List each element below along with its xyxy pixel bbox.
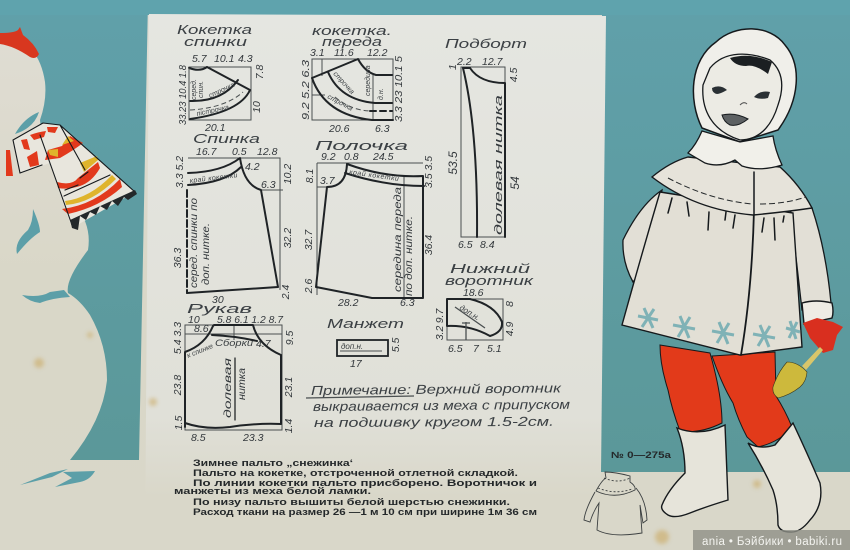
measurements: 2.6 — [303, 279, 315, 294]
pattern piece: нитка — [236, 368, 248, 400]
measurements — [446, 56, 522, 251]
pattern piece — [189, 67, 251, 120]
measurements: 2.4 — [280, 285, 292, 300]
pattern piece: серед. — [190, 79, 198, 100]
measurements: 2.2 — [456, 56, 472, 68]
title: Подборт — [445, 36, 527, 51]
measurements: 3.3 5.2 — [174, 156, 186, 188]
panel: pattern sheet — [145, 14, 606, 550]
diagram: манжет — [327, 316, 404, 370]
measurements — [172, 146, 294, 306]
measurements — [172, 314, 296, 444]
measurements: 32.2 — [282, 228, 294, 248]
pattern piece: д.н. — [377, 88, 385, 100]
coat gathers — [668, 198, 784, 240]
measurements: 33.23 10.4 1.8 — [177, 65, 189, 125]
title: Рукав — [187, 301, 252, 316]
pattern piece — [185, 325, 282, 430]
measurements: 53.5 — [446, 151, 460, 175]
hood — [693, 29, 796, 142]
measurements: 4.5 — [508, 68, 520, 82]
measurements: 23.3 — [242, 432, 264, 444]
description text block — [174, 458, 537, 517]
pattern piece: середина — [364, 65, 372, 96]
measurements: 10 — [188, 314, 200, 326]
measurements: 3.7 — [320, 175, 336, 187]
paper stains — [34, 332, 761, 544]
title — [445, 261, 534, 288]
measurements: 6.3 — [400, 297, 415, 309]
measurements: 0.5 — [232, 146, 247, 158]
measurements: 1.5 — [173, 416, 185, 430]
measurements: 9.2 5.2 6.3 — [300, 60, 312, 120]
pattern piece: доп.н. — [458, 303, 481, 322]
shovel — [773, 347, 823, 398]
left eye — [712, 86, 727, 94]
measurements: 8 — [504, 301, 516, 307]
right boot — [748, 423, 821, 532]
measurements: 3.1 — [310, 47, 325, 59]
pattern piece: долевая нитка — [493, 95, 505, 235]
pattern piece: долевая — [222, 357, 234, 418]
measurements: 6.3 — [261, 179, 276, 191]
measurements: 36.3 — [172, 248, 184, 268]
title: Манжет — [327, 316, 404, 331]
measurements: 10.2 — [282, 164, 294, 184]
measurements: 1 — [447, 64, 459, 70]
measurements: 5.4 3.3 — [172, 322, 184, 354]
title: воротник — [445, 273, 534, 288]
title: спинки — [184, 34, 247, 49]
pattern piece: край кокетки — [349, 168, 399, 183]
diagram: рукав — [172, 301, 296, 444]
girl illustration — [622, 29, 843, 532]
face — [703, 54, 782, 140]
measurements: 9.7 — [434, 308, 446, 323]
measurements: 5.8 6.1 1.2 8.7 — [217, 314, 284, 326]
description text block: Расход ткани на размер 26 —1 м 10 см при ширине 1м 36 см — [193, 507, 537, 517]
measurements: 9.2 — [321, 151, 336, 163]
measurements: 12.2 — [367, 47, 388, 59]
article number: № 0—275а — [611, 450, 672, 460]
snowman hat — [0, 27, 39, 58]
hair — [730, 56, 772, 74]
description text block: манжеты из меха белой ламки. — [174, 486, 371, 496]
pattern piece: середина переда — [392, 187, 404, 292]
mitten — [803, 318, 843, 353]
cape stitching — [668, 178, 806, 204]
pattern piece: доп. нитке. — [200, 223, 212, 285]
measurements: 11.6 — [334, 47, 354, 59]
title: Полочка — [315, 138, 408, 153]
red right leg — [712, 352, 792, 447]
red left leg — [660, 345, 722, 432]
diagram: нижний воротник — [434, 261, 534, 355]
title — [177, 22, 252, 49]
note: выкраивается из меха с припуском — [313, 397, 570, 414]
title — [312, 23, 392, 49]
measurements — [350, 338, 402, 370]
snowman button dab — [16, 209, 40, 254]
measurements: 12.7 — [482, 56, 504, 68]
nose — [740, 103, 747, 105]
title: переда — [322, 34, 382, 49]
snowman ground shadow — [20, 469, 95, 487]
measurements: 6.5 — [448, 343, 463, 355]
right teal background — [601, 0, 850, 472]
description text block: Зимнее пальто „снежинка‘ — [193, 458, 353, 468]
coat centre seam — [741, 210, 754, 355]
mouth — [722, 114, 748, 125]
measurements: 4.9 — [504, 322, 516, 336]
pattern piece: строчка — [332, 71, 355, 96]
measurements: 16.7 — [196, 146, 218, 158]
snowman details — [0, 27, 137, 487]
pattern piece — [461, 67, 505, 237]
measurements: 3.5 3.5 — [423, 156, 435, 188]
measurements: 23.1 — [283, 377, 295, 398]
measurements: 3.2 — [434, 326, 446, 340]
watermark — [693, 530, 850, 550]
measurements: 17 — [350, 358, 363, 370]
measurements: 20.6 — [328, 123, 350, 135]
measurements: 36.4 — [423, 235, 435, 255]
description text block: По линии кокетки пальто присборено. Воротничок и — [193, 478, 537, 488]
pattern piece: по доп. нитке. — [403, 216, 415, 296]
measurements — [434, 287, 516, 355]
right eye — [754, 92, 770, 99]
measurements: 6.5 — [458, 239, 473, 251]
measurements: 20.1 — [204, 122, 225, 134]
pattern piece — [316, 163, 424, 298]
measurements: 6.3 — [375, 123, 390, 135]
title: Нижний — [450, 261, 530, 276]
left teal background — [0, 0, 148, 460]
measurements: 10.1 — [214, 53, 234, 65]
pattern piece: Сборки — [215, 338, 253, 348]
description text block: По низу пальто вышиты белой шерстью снежинки. — [193, 497, 510, 507]
title: кокетка. — [312, 23, 392, 38]
small coat sketch — [584, 472, 647, 535]
snowman eye dab — [15, 112, 39, 134]
diagram: подборт — [445, 36, 527, 251]
note — [306, 380, 570, 430]
measurements: 9.5 — [284, 331, 296, 345]
measurements — [303, 151, 435, 309]
measurements: 54 — [508, 176, 522, 190]
measurements: 32.7 — [303, 229, 315, 250]
measurements: 0.8 — [344, 151, 359, 163]
cape yoke — [652, 157, 812, 215]
measurements: 12.8 — [257, 146, 278, 158]
pattern piece: доп.н. — [341, 342, 363, 351]
measurements: 1.4 — [283, 419, 295, 433]
fur collar — [688, 131, 782, 169]
measurements — [300, 47, 405, 135]
measurements: 5.7 — [192, 53, 208, 65]
diagram: кокетка спинки — [177, 22, 266, 134]
description text block: Пальто на кокетке, отстроченной отлетной складкой. — [193, 468, 518, 478]
pattern piece: к спинке — [186, 343, 214, 360]
measurements: 10 — [251, 101, 263, 113]
pattern piece: край кокетки — [189, 171, 238, 185]
measurements: 8.6 — [194, 323, 209, 335]
top teal strip — [0, 0, 850, 15]
measurements: 8.1 — [304, 169, 316, 183]
note: на подшивку кругом 1.5-2см. — [314, 414, 554, 430]
snowman arm — [22, 290, 70, 303]
coat right sleeve — [790, 205, 831, 310]
measurements: 7.8 — [254, 65, 266, 79]
diagram: кокетка переда — [300, 23, 405, 135]
measurements: 3.3 23 10.1 5 — [393, 56, 405, 122]
measurements: 5.1 — [487, 343, 502, 355]
measurements: 4.2 — [245, 161, 260, 173]
pattern piece: строчка — [326, 94, 354, 113]
measurements: 4.7 — [256, 338, 272, 350]
measurements: 4.3 — [238, 53, 253, 65]
measurements: 5.5 — [390, 338, 402, 352]
scarf — [6, 123, 137, 230]
pattern piece — [187, 158, 283, 293]
pattern piece: пiстрочка — [196, 104, 230, 118]
measurements: 30 — [212, 294, 224, 306]
coat body — [622, 192, 802, 355]
measurements: 24.5 — [372, 151, 394, 163]
measurements: 8.5 — [191, 432, 206, 444]
pattern piece — [312, 59, 393, 120]
measurements: 7 — [473, 343, 480, 355]
cuff — [802, 301, 833, 324]
title: Кокетка — [177, 22, 252, 37]
left boot — [662, 425, 728, 517]
measurements: 8.4 — [480, 239, 495, 251]
title: Спинка — [193, 131, 260, 146]
pattern piece: строчка — [208, 82, 236, 100]
coat left sleeve — [623, 190, 662, 282]
coat snowflakes — [638, 308, 800, 347]
pattern piece: спин. — [198, 81, 205, 98]
measurements: 18.6 — [463, 287, 484, 299]
measurements: 23.8 — [172, 375, 184, 396]
measurements — [177, 53, 266, 134]
note: Примечание: Верхний воротник — [311, 380, 562, 398]
measurements: 28.2 — [337, 297, 359, 309]
diagram: спинка — [172, 131, 294, 306]
watermark: ania • Бэйбики • babiki.ru — [702, 536, 842, 548]
diagram: полочка — [303, 138, 435, 309]
pattern piece: серед. спинки по — [188, 198, 200, 288]
